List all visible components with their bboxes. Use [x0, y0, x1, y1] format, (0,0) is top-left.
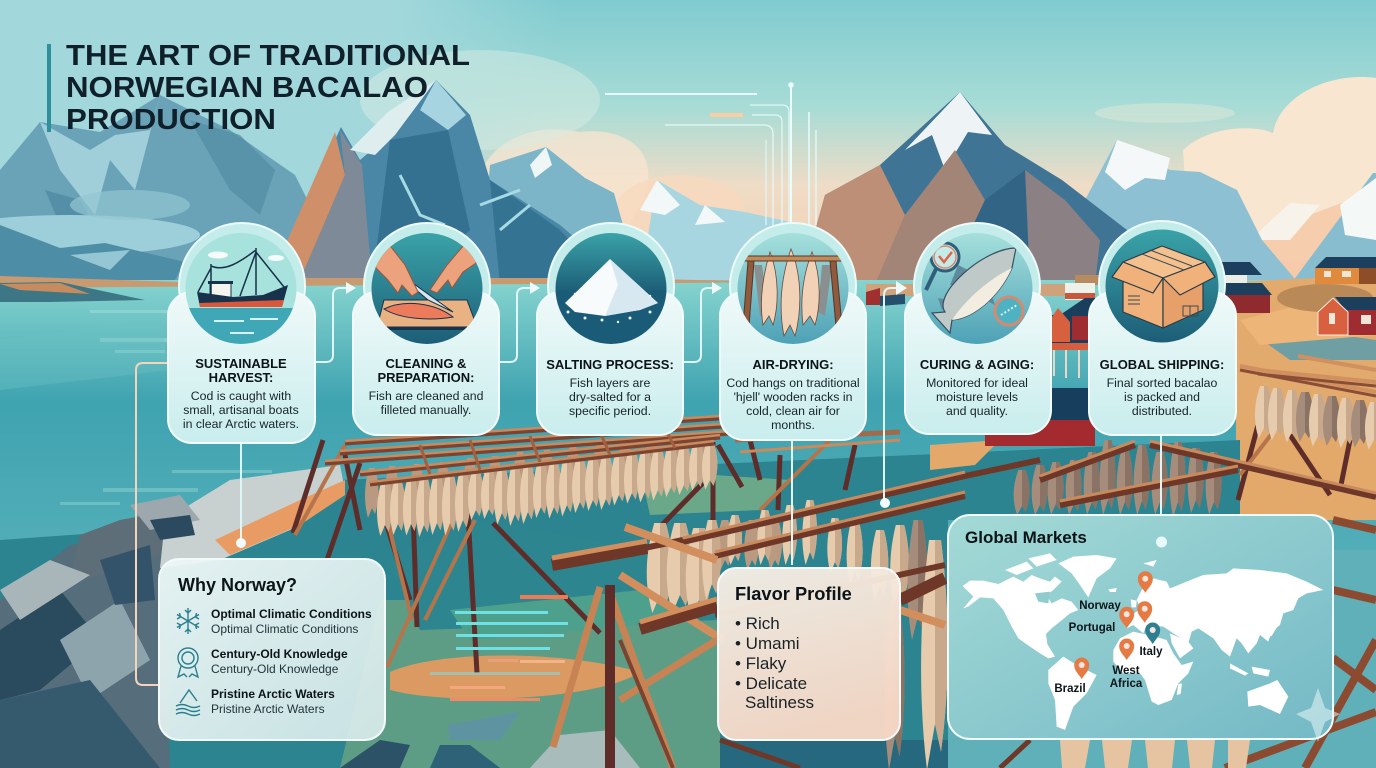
background: foreground wooden beams: [552, 356, 1376, 768]
heading: CLEANING &: [386, 356, 466, 371]
flavor list: Saltiness: [745, 693, 814, 712]
description: [183, 389, 299, 431]
step 1: sustainable harvest: [168, 223, 315, 443]
background: rack legs behind fish: [293, 410, 1350, 673]
heading: GLOBAL SHIPPING:: [1100, 357, 1224, 372]
step 6: global shipping: [1089, 221, 1236, 435]
sparkle mark: [1296, 688, 1340, 742]
reason: waters: [211, 687, 335, 716]
step 5: curing and aging: [905, 223, 1051, 434]
reason: climate: Optimal Climatic Conditions: [211, 607, 372, 621]
map pins: [1074, 571, 1160, 679]
description: dry-salted for a: [569, 390, 651, 404]
reason: knowledge: Century-Old Knowledge: [211, 647, 348, 661]
background: fjord water and shores: [0, 280, 1376, 550]
world map: [963, 553, 1323, 730]
background: red houses: [866, 257, 1376, 446]
background: central mountains: [270, 80, 800, 285]
icon: open cardboard box: [1105, 229, 1219, 345]
reason: knowledge: Century-Old Knowledge: [211, 662, 339, 676]
flavor list: • Flaky: [735, 654, 787, 673]
background: shore right and ground: [1236, 275, 1376, 450]
reason: waters: Pristine Arctic Waters: [211, 702, 325, 716]
background: hanging fish, top rack: [365, 432, 717, 537]
description: small, artisanal boats: [183, 403, 299, 417]
description: and quality.: [946, 404, 1008, 418]
description: filleted manually.: [381, 403, 471, 417]
panel: flavor profile: [718, 568, 900, 740]
reason: waters: Pristine Arctic Waters: [211, 687, 335, 701]
description: [726, 376, 860, 432]
icon: cod under inspection: [921, 233, 1033, 348]
reason: knowledge: [211, 647, 348, 676]
icon: hands filleting: [370, 233, 484, 348]
heading: [195, 356, 287, 385]
heading: SALTING PROCESS:: [546, 357, 674, 372]
flavor list: [735, 614, 814, 712]
background: bottom fish under map: [1060, 740, 1250, 768]
title: PRODUCTION: [66, 104, 276, 136]
background: clouds: [360, 50, 1376, 260]
heading: [377, 356, 475, 385]
map labels: Africa: [1110, 678, 1143, 690]
description: 'hjell' wooden racks in: [734, 390, 853, 404]
background: fish right racks: [1014, 386, 1376, 517]
icon: rosette: [178, 648, 198, 677]
description: Final sorted bacalao: [1107, 376, 1218, 390]
flavor list: • Umami: [735, 634, 800, 653]
background: fish on mid racks: [647, 500, 948, 768]
panel: global markets: [948, 515, 1340, 742]
step 4: air-drying: [720, 223, 866, 440]
description: [926, 376, 1028, 418]
description: Fish are cleaned and: [369, 389, 484, 403]
map labels: West: [1112, 665, 1140, 677]
heading: Flavor Profile: [735, 583, 852, 604]
background: digital data lines: [430, 82, 816, 701]
connector arrows between steps: [136, 281, 1161, 685]
heading: PREPARATION:: [377, 370, 475, 385]
background: far peach lower sky at right: [1190, 190, 1376, 285]
map labels: Portugal: [1069, 622, 1115, 634]
icon: fishing boat: [185, 233, 297, 348]
description: is packed and: [1124, 390, 1200, 404]
description: distributed.: [1132, 404, 1192, 418]
map labels: Brazil: [1054, 683, 1086, 695]
reason: climate: Optimal Climatic Conditions: [211, 622, 358, 636]
map labels: [1054, 600, 1163, 695]
description: in clear Arctic waters.: [183, 417, 299, 431]
description: [569, 376, 651, 418]
background: left hazy mountains: [0, 95, 350, 285]
title: [47, 40, 470, 136]
panel: why norway: [159, 559, 385, 740]
title: NORWEGIAN BACALAO: [66, 72, 428, 104]
description: Cod hangs on traditional: [726, 376, 860, 390]
description: cold, clean air for: [746, 404, 840, 418]
flavor list: • Delicate: [735, 674, 807, 693]
map labels: Italy: [1139, 646, 1163, 658]
heading: HARVEST:: [209, 370, 273, 385]
description: Monitored for ideal: [926, 376, 1028, 390]
background: left rocks: [0, 465, 410, 768]
step 2: cleaning and preparation: [353, 223, 499, 435]
description: months.: [771, 418, 815, 432]
description: [369, 389, 484, 417]
title: THE ART OF TRADITIONAL: [66, 40, 470, 72]
description: moisture levels: [936, 390, 1018, 404]
description: [1107, 376, 1218, 418]
heading: SUSTAINABLE: [195, 356, 287, 371]
flavor list: • Rich: [735, 614, 780, 633]
connector dot: [1156, 536, 1167, 548]
background: center ground: [0, 440, 1240, 768]
background: right mountains: [800, 92, 1376, 285]
background: wooden top rack beams: [325, 416, 900, 484]
icon: salt pile: [555, 233, 667, 350]
description: specific period.: [569, 404, 651, 418]
reason: climate: [211, 607, 372, 636]
icon: snowflake: [177, 608, 199, 634]
description: Fish layers are: [570, 376, 650, 390]
map labels: Norway: [1079, 600, 1121, 612]
icon: drying rack with cod: [737, 233, 849, 348]
icon: mountain over water: [176, 690, 200, 716]
heading: Why Norway?: [178, 575, 297, 595]
heading: AIR-DRYING:: [752, 357, 834, 372]
heading: CURING & AGING:: [920, 357, 1034, 372]
description: Cod is caught with: [191, 389, 291, 403]
step 3: salting process: [537, 223, 683, 435]
heading: Global Markets: [965, 528, 1087, 547]
